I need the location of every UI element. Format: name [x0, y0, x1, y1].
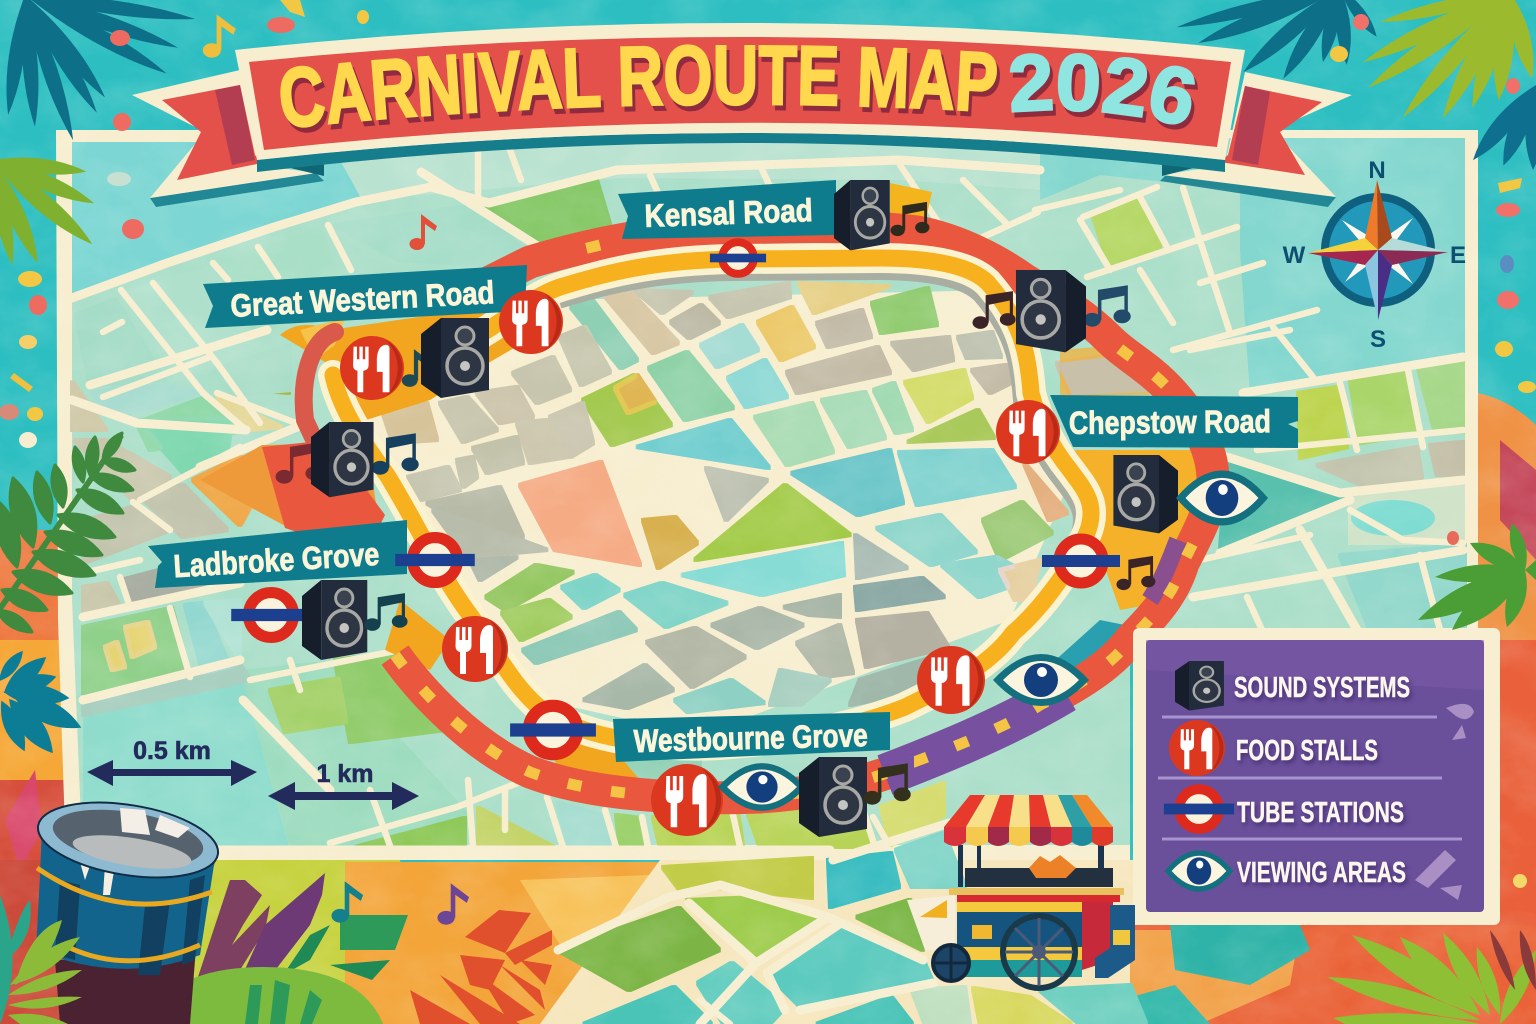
- lower left land: [83, 670, 290, 850]
- icon: tube Chepstow: [1042, 539, 1120, 583]
- icon: note Westbourne: [864, 763, 911, 805]
- drum body: [36, 826, 216, 969]
- decorative notes: [203, 14, 469, 925]
- orange route surroundings: [200, 183, 1215, 780]
- foliage: lower left teal frond: [0, 652, 80, 752]
- icon: note right top left: [973, 291, 1016, 329]
- legend: sound systems: SOUND SYSTEMS: [1234, 672, 1410, 704]
- map outer land base: [72, 142, 1465, 845]
- icon: note right top right: [1084, 285, 1131, 327]
- cart canopy: [944, 795, 985, 827]
- drum base shadow: [55, 960, 195, 1024]
- icon: speaker left: [311, 422, 374, 497]
- cart body: [957, 895, 1120, 902]
- label: Chepstow Road: [1050, 395, 1298, 448]
- icon: eye south east: [993, 654, 1089, 706]
- legend frame: [1133, 628, 1500, 925]
- icon: note left red: [276, 442, 323, 484]
- label: Ladbroke Grove: [148, 520, 407, 588]
- scale bar 0.5 km: 0.5 km: [133, 737, 211, 765]
- icon: note Kensal: [890, 202, 929, 236]
- cart valance: [944, 827, 966, 846]
- streets west and outer: [72, 160, 1463, 1024]
- steel drum: [33, 791, 223, 1024]
- map blocks: [72, 178, 1465, 1024]
- icon: tube Ladbroke east: [395, 538, 475, 582]
- icon: food Great Western 2: [340, 336, 404, 400]
- label: Kensal Road: Kensal Road: [644, 192, 813, 234]
- icon: note Great Western: [402, 349, 431, 387]
- foliage: right mid green frond: [1418, 523, 1536, 630]
- compass rose: N: [1368, 157, 1386, 184]
- cart paper patch: [907, 895, 955, 950]
- legend: viewing areas: VIEWING AREAS: [1237, 857, 1406, 889]
- foliage: top left dark palm: [1, 0, 196, 143]
- fold shadows: [257, 160, 324, 176]
- drum bands: [37, 868, 212, 904]
- tail shadows: [150, 173, 1336, 207]
- icon: speaker Chepstow: [1113, 455, 1178, 533]
- label: Westbourne Grove: Westbourne Grove: [633, 717, 868, 759]
- legend: tube stations: [1164, 789, 1404, 829]
- label: Chepstow Road: Chepstow Road: [1069, 403, 1271, 441]
- legend panel: [1146, 640, 1484, 912]
- foliage: bottom left purple leaves: [143, 873, 408, 1024]
- label: Great Western Road: Great Western Road: [230, 274, 495, 324]
- foliage: left green palm: [0, 153, 98, 267]
- title year: 2026: [1010, 53, 1198, 130]
- icon: food Westbourne: [651, 764, 723, 836]
- scale bar 1 km: 1 km: [317, 760, 373, 788]
- icon: tube Westbourne: [510, 706, 596, 754]
- left tail: [132, 70, 316, 198]
- foliage: bottom right maroon leaves: [1490, 930, 1536, 990]
- scale bar 0.5 km: [87, 737, 257, 786]
- icon: speaker Ladbroke: [302, 580, 367, 660]
- cream ring edge: [333, 258, 1091, 746]
- legend: viewing areas: [1164, 850, 1406, 892]
- icon: yellow note behind Chepstow speaker: [1165, 480, 1195, 520]
- legend: food stalls: FOOD STALLS: [1236, 735, 1378, 767]
- cart table: [949, 888, 1124, 895]
- cart grill: [965, 868, 1113, 887]
- title banner: [132, 23, 1392, 248]
- icon: eye Westbourne: [718, 763, 806, 811]
- east blocks: [1092, 198, 1160, 267]
- streets minor: [83, 150, 1463, 1024]
- icon: note left teal: [372, 433, 419, 475]
- icon: note Chepstow lower: [1116, 556, 1155, 590]
- food cart: [907, 795, 1135, 988]
- label: Ladbroke Grove: Ladbroke Grove: [172, 536, 380, 584]
- icon: food south east: [917, 646, 985, 714]
- compass rose: E: [1450, 242, 1466, 269]
- foliage: red bottom leaves: [410, 910, 552, 1024]
- icon: note Ladbroke: [365, 593, 408, 631]
- purple lower segment: [885, 692, 1065, 775]
- icon: tube Kensal: [710, 242, 766, 274]
- inner grey shadow: [557, 265, 1088, 540]
- banner border: [235, 23, 1245, 160]
- foliage: top right dark palm: [1175, 0, 1382, 83]
- compass rose: [1283, 157, 1466, 353]
- outer red festival band: [395, 227, 1213, 798]
- legend: food stalls: [1169, 720, 1378, 776]
- map paper: [56, 130, 1478, 860]
- cart posts: [958, 845, 1104, 887]
- legend: sound systems: [1175, 661, 1410, 711]
- yellow dashes on red band: [395, 245, 1213, 798]
- title text: CARNIVAL ROUTE MAP: [280, 44, 1000, 133]
- compass rose: S: [1370, 326, 1386, 353]
- foliage: left mid green frond: [0, 433, 135, 632]
- foliage: bottom left leaves: [0, 895, 31, 1024]
- map upper water regions: [72, 142, 362, 298]
- icon: eye Chepstow: [1176, 470, 1268, 526]
- red west strip: [304, 332, 335, 448]
- legend: tube stations: TUBE STATIONS: [1237, 797, 1404, 829]
- right tail: [1162, 72, 1352, 197]
- inner ring blocks: [383, 403, 437, 443]
- cart big wheel: [1003, 916, 1075, 988]
- route: [200, 183, 1215, 798]
- cart small wheel: [933, 945, 969, 981]
- icon: food Chepstow: [996, 400, 1060, 464]
- compass rose: W: [1283, 242, 1306, 269]
- lake: [1351, 500, 1435, 536]
- foliage: top right lower blue palm: [1466, 79, 1536, 170]
- icon: speaker Great Western: [421, 318, 489, 398]
- icon: food Great Western 1: [499, 290, 563, 354]
- label: Kensal Road: [618, 180, 836, 239]
- icon: speaker Kensal: [834, 180, 890, 250]
- foliage: bottom right green palm: [1327, 933, 1536, 1024]
- legend: [1133, 628, 1500, 925]
- drum rim: [33, 791, 223, 889]
- foliage: top right green palm: [1359, 0, 1536, 123]
- banner red: [249, 37, 1231, 150]
- yellow route: [333, 258, 1091, 746]
- icon: speaker top right: [1016, 270, 1086, 352]
- bottom blocks: [663, 858, 812, 898]
- icon: food Ladbroke: [442, 616, 508, 682]
- scale bar 1 km: [268, 760, 419, 810]
- icon: speaker Westbourne: [799, 757, 867, 837]
- icon: tube Ladbroke west: [231, 593, 311, 637]
